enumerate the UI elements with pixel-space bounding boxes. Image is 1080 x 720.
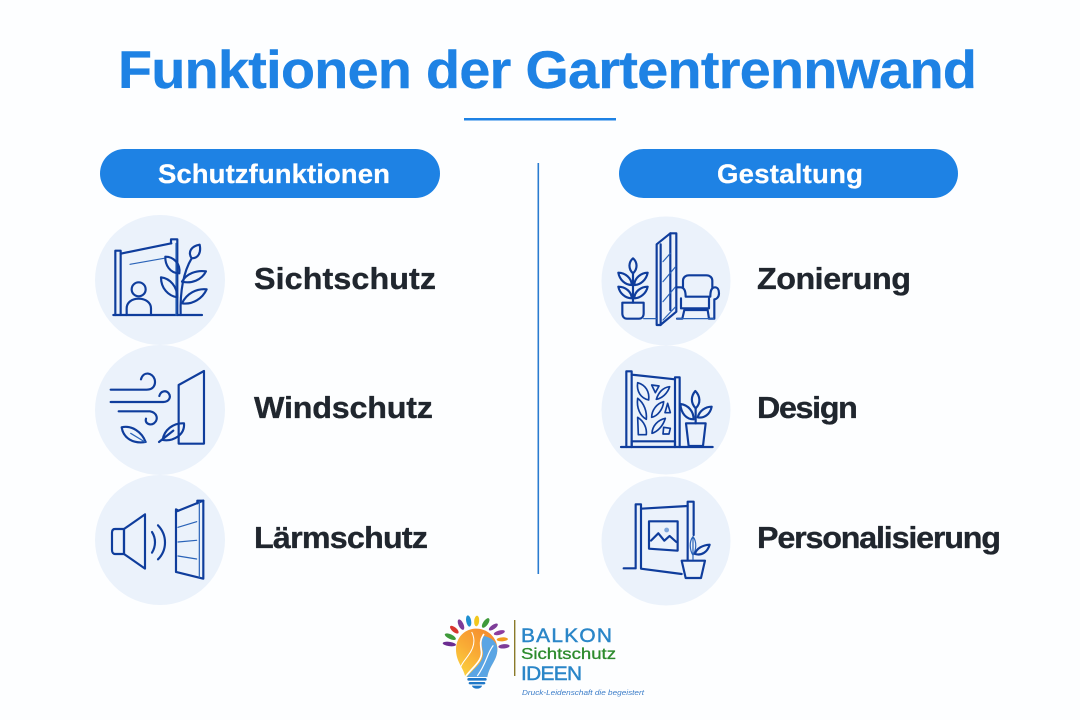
panel: Schutzfunktionen [95, 149, 440, 605]
label: Windschutz: Windschutz [254, 390, 433, 425]
icon: screen, person and plant [113, 239, 207, 315]
label: Zonierung: Zonierung [757, 261, 911, 296]
label: Sichtschutz: Sichtschutz [254, 261, 436, 296]
icon: speaker and sound wall [112, 501, 203, 579]
logo text: BALKON: BALKON [521, 626, 612, 647]
label: Lärmschutz: Lärmschutz [254, 520, 428, 555]
title underline [464, 118, 616, 120]
heading pill: Schutzfunktionen: Schutzfunktionen [158, 159, 390, 189]
icon: screen with picture and plant [624, 502, 710, 578]
item: Lärmschutz [95, 475, 428, 605]
logo: Balkon Sichtschutz Ideen [442, 615, 645, 697]
logo separator [514, 620, 515, 676]
logo text: IDEEN: IDEEN [521, 664, 582, 685]
item: Sichtschutz [95, 215, 436, 345]
item: Windschutz [95, 345, 433, 475]
item: Personalisierung [602, 476, 1001, 606]
icon: wind, wall and leaves [111, 371, 204, 444]
label: Design: Design [757, 390, 858, 425]
logo text: Sichtschutz: Sichtschutz [521, 646, 616, 663]
panel: Gestaltung [602, 149, 1001, 606]
logo tagline: Druck-Leidenschaft die begeistert [522, 688, 645, 697]
item: Zonierung [602, 216, 911, 346]
heading pill: Gestaltung: Gestaltung [717, 159, 863, 189]
icon: decorative leaf screen and plant [621, 371, 713, 447]
logo bulb icon [442, 615, 510, 689]
center divider [538, 163, 539, 574]
heading pill: Schutzfunktionen [100, 149, 440, 198]
item: Design [602, 346, 858, 474]
title: Funktionen der Gartentrennwand [118, 40, 977, 100]
label: Personalisierung: Personalisierung [757, 520, 1001, 555]
heading pill: Gestaltung [619, 149, 958, 198]
icon: divider, plant and armchair [618, 233, 719, 325]
